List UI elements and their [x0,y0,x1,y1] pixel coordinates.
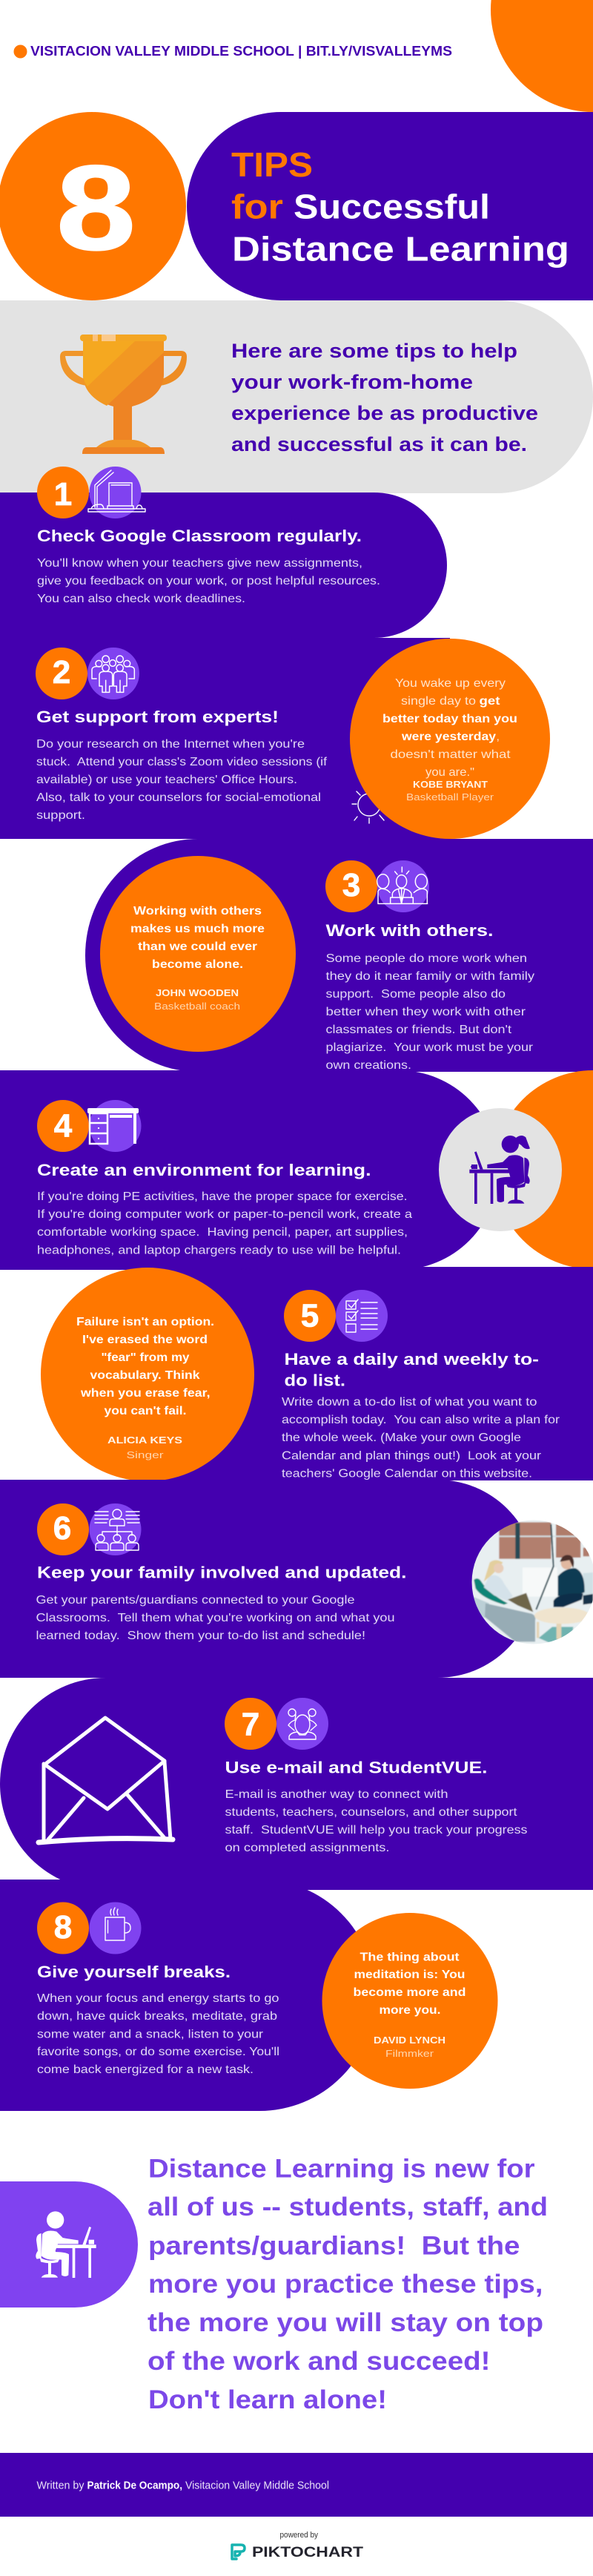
gray circle with working girl icon [439,1108,562,1231]
panel: tip 7: on completed assignments. [225,1842,390,1854]
panel: tip 7 [0,1678,593,1890]
quote: David Lynch: The thing about [360,1951,460,1964]
quote: Kobe Bryant: you are." [425,766,474,779]
number badge 3: 3 [342,867,360,903]
panel: tip 2: Do your research on the Internet when you're [36,738,305,751]
quote: Kobe Bryant: doesn't matter what [390,748,511,761]
number badge 4 [37,1100,89,1152]
quote: John Wooden: JOHN WOODEN [156,987,239,998]
decorative top-right orange circle [491,0,593,112]
panel: tip 1: give you feedback on your work, or post helpful resources. [37,575,380,587]
footer bar with credit: Visitacion Valley Middle School [185,2480,329,2492]
panel: tip 8: favorite songs, or do some exercise. You'll [37,2046,279,2058]
panel: tip 6: Classrooms. Tell them what you're working on and what you [36,1612,394,1624]
panel: tip 3: own creations. [326,1059,411,1072]
number badge 4: 4 [54,1108,73,1144]
panel: intro: experience be as productive [231,402,538,424]
panel: tip 2: Get support from experts! [36,708,279,726]
panel: tip 5 [41,1267,593,1481]
quote: Alicia Keys [41,1268,254,1481]
panel: tip 5: accomplish today. You can also write a plan for [282,1414,560,1426]
quote: Alicia Keys: I've erased the word [82,1334,208,1346]
panel: intro [0,300,593,493]
panel: tip 8: When your focus and energy starts to go [37,1992,279,2005]
quote: Alicia Keys: vocabulary. Think [90,1369,200,1382]
panel: intro: Here are some tips to help [231,340,517,362]
number badge 7: 7 [242,1706,259,1743]
panel: tip 1: You can also check work deadlines. [37,593,245,605]
quote: John Wooden: makes us much more [130,923,265,935]
panel: tip 5: Calendar and plan things out!) Look at your [282,1449,542,1463]
number badge 7 [225,1698,276,1750]
closing message: of the work and succeed! [148,2347,491,2376]
powered by Piktochart: PIKTOCHART [252,2545,363,2560]
panel: tip 1: Check Google Classroom regularly. [37,527,362,545]
quote: David Lynch: more you. [380,2004,440,2017]
panel: tip 8: some water and a snack, listen to your [37,2028,264,2041]
quote: Alicia Keys: Singer [126,1449,164,1460]
quote: Alicia Keys: you can't fail. [104,1405,187,1417]
number badge 6 [37,1503,89,1555]
quote: Alicia Keys: "fear" from my [101,1351,190,1364]
quote: Kobe Bryant: Basketball Player [406,791,494,803]
big number 8 badge [0,112,186,300]
panel: tip 4: headphones, and laptop chargers ready to use will be helpful. [37,1245,401,1256]
panel: intro: your work-from-home [231,371,473,393]
photo: family meeting [471,1521,593,1644]
powered by Piktochart: powered by [280,2531,318,2540]
title panel [187,112,593,300]
panel: tip 7: staff. StudentVUE will help you track your progress [225,1824,528,1837]
big number 8 badge: 8 [56,141,136,275]
panel: tip 8: down, have quick breaks, meditate, grab [37,2010,277,2023]
footer bar with credit: Written by [37,2480,85,2492]
quote: Kobe Bryant: get [479,695,500,708]
quote: Kobe Bryant: single day to [401,695,476,708]
quote: Kobe Bryant: better today than you [382,713,517,725]
number badge 1 [37,467,89,518]
quote: John Wooden: Working with others [133,905,262,918]
decorative orange circle right of tip 4 [494,1070,593,1269]
panel: tip 7: E-mail is another way to connect with [225,1788,448,1801]
icon: checklist [336,1290,388,1342]
quote: Kobe Bryant: , [497,731,500,743]
panel: tip 7: Use e-mail and StudentVUE. [225,1758,488,1777]
closing message: Distance Learning is new for [148,2154,535,2184]
number badge 6: 6 [53,1510,71,1546]
panel: tip 6 [0,1480,537,1678]
panel: tip 4: Create an environment for learning. [37,1161,371,1179]
icon: three people at table [377,860,429,912]
quote: John Wooden: than we could ever [138,941,257,953]
quote: Alicia Keys: ALICIA KEYS [107,1434,182,1446]
powered by Piktochart [232,2531,363,2560]
panel: tip 3: better when they work with other [326,1006,526,1018]
quote: Kobe Bryant [350,639,550,839]
quote: David Lynch: become more and [353,1986,466,1999]
panel: tip 5: Write down a to-do list of what you want to [282,1396,537,1409]
number badge 8: 8 [54,1909,72,1946]
quote: John Wooden [100,856,296,1052]
panel: tip 3: they do it near family or with family [326,970,534,983]
panel: tip 2: stuck. Attend your class's Zoom video sessions (if [36,756,328,768]
quote: David Lynch: DAVID LYNCH [374,2035,445,2046]
number badge 5 [284,1290,336,1342]
header line: VISITACION VALLEY MIDDLE SCHOOL | BIT.LY/VISVALLEYMS [30,44,452,59]
number badge 5: 5 [301,1298,319,1334]
panel: tip 5: Have a daily and weekly to- [285,1350,539,1368]
quote: Kobe Bryant: were yesterday [401,731,496,743]
panel: tip 6: Keep your family involved and updated. [37,1564,406,1581]
number badge 8 [37,1902,89,1954]
panel: tip 4: If you're doing PE activities, have the proper space for exercise. [37,1190,408,1203]
footer bar with credit: Patrick De Ocampo, [87,2480,182,2492]
panel: tip 2: support. [36,809,85,822]
icon: student at desk [36,2211,96,2278]
closing message: parents/guardians! But the [148,2231,520,2261]
panel: tip 4: comfortable working space. Having pencil, paper, art supplies, [37,1226,408,1239]
panel: tip 2: Also, talk to your counselors for social-emotional [36,791,321,804]
quote: Kobe Bryant: KOBE BRYANT [413,779,488,790]
closing icon panel [0,2181,138,2307]
panel: tip 2: available) or use your teachers' Office Hours. [36,774,297,786]
title panel: Distance Learning [232,230,569,269]
panel: tip 6: learned today. Show them your to-do list and schedule! [36,1630,365,1642]
panel: tip 2 [0,638,550,839]
panel: tip 6: Get your parents/guardians connected to your Google [36,1594,355,1607]
title panel: Successful [294,187,490,225]
panel: tip 7: students, teachers, counselors, and other support [225,1806,517,1819]
quote: John Wooden: Basketball coach [154,1001,240,1012]
icon: coffee mug [89,1902,141,1954]
panel: tip 5: the whole week. (Make your own Google [282,1432,521,1444]
closing message [148,2154,548,2414]
quote: David Lynch: Filmmker [385,2048,434,2059]
panel: tip 3: plagiarize. Your work must be your [326,1041,534,1054]
closing message: Don't learn alone! [148,2385,387,2414]
quote: Alicia Keys: when you erase fear, [80,1387,211,1400]
closing message: all of us -- students, staff, and [148,2193,548,2221]
panel: tip 3 [85,839,593,1072]
quote: Alicia Keys: Failure isn't an option. [76,1316,214,1328]
number badge 1: 1 [54,476,72,513]
icon: desk [87,1100,141,1152]
icon: family hierarchy [89,1503,141,1555]
panel: tip 3: Work with others. [326,921,494,940]
icon: counselors around student [276,1698,328,1750]
panel: tip 1 [0,467,447,638]
number badge 2 [36,648,87,699]
title panel: for [231,187,283,225]
icon: trophy [60,335,187,454]
closing message: more you practice these tips, [148,2270,543,2299]
icon: hand-drawn envelope [39,1718,173,1842]
icon: desk with lamp [88,467,145,518]
panel: tip 4 [0,1070,498,1270]
quote: David Lynch [322,1913,498,2089]
closing message: the more you will stay on top [148,2308,543,2337]
quote: Kobe Bryant: You wake up every [395,677,506,690]
quote: John Wooden: become alone. [152,958,243,971]
icon: sun [352,791,384,823]
quote: David Lynch: meditation is: You [354,1969,466,1981]
panel: tip 4: If you're doing computer work or paper-to-pencil work, create a [37,1208,412,1221]
panel: intro: and successful as it can be. [231,433,527,455]
panel: tip 1: You'll know when your teachers give new assignments, [37,557,362,570]
title panel: TIPS [231,145,313,184]
number badge 2: 2 [53,654,70,691]
panel: tip 5: teachers' Google Calendar on this website. [282,1467,532,1480]
panel: tip 8 [0,1880,498,2111]
number badge 3 [325,860,377,912]
panel: tip 8: come back energized for a new task. [37,2063,254,2076]
panel: tip 3: support. Some people also do [326,988,506,1001]
panel: tip 5: do list. [285,1371,345,1390]
icon: group of people [87,648,139,699]
panel: tip 8: Give yourself breaks. [37,1963,231,1981]
panel: tip 3: Some people do more work when [326,952,527,965]
footer bar with credit [0,2453,593,2517]
logo mark [232,2545,245,2559]
panel: tip 3: classmates or friends. But don't [326,1024,512,1036]
